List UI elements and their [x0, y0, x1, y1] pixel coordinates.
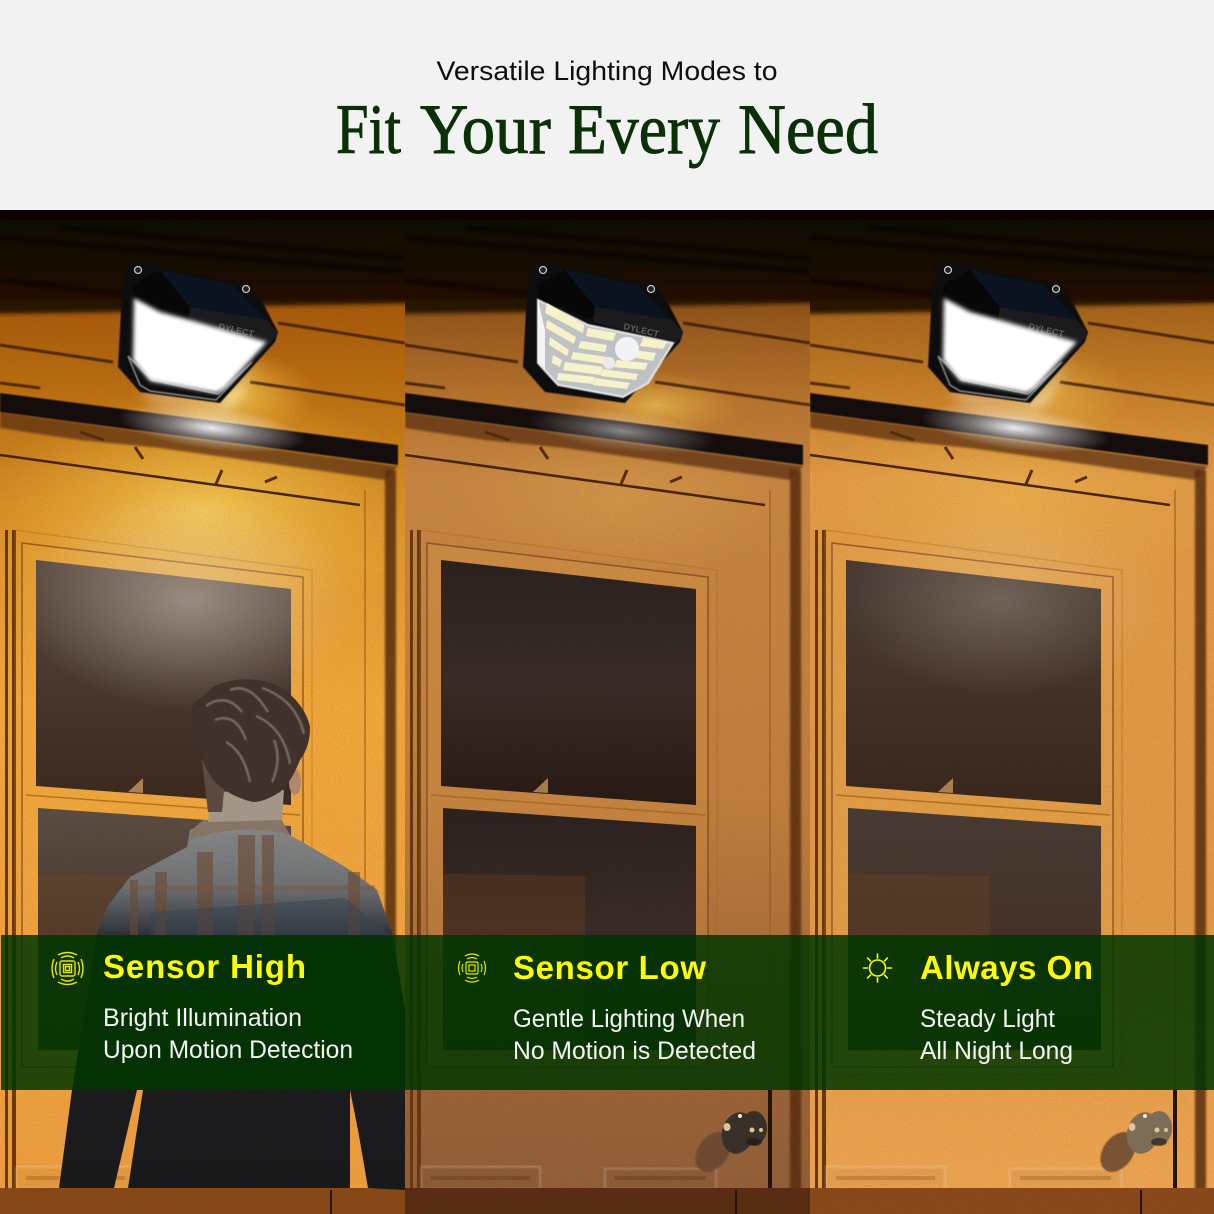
- lamp: sensor low, LEDs visible: [523, 262, 683, 403]
- icon: motion sensor small: [458, 954, 486, 982]
- lamp: always on, bright: [928, 262, 1088, 410]
- heading: sensor low: Sensor Low: [513, 949, 706, 986]
- door knob: [1093, 1090, 1177, 1188]
- icon: motion sensor: [52, 952, 83, 984]
- panel: sensor high photo: [0, 195, 430, 1214]
- title: Fit: [336, 91, 401, 169]
- heading: always on: Always On: [920, 949, 1093, 986]
- description: sensor low: [513, 1005, 756, 1065]
- subtitle: Versatile Lighting Modes to: [436, 56, 778, 86]
- person from behind: [59, 679, 405, 1190]
- title: Need: [738, 91, 878, 169]
- caption band: [1, 935, 1214, 1090]
- description: sensor high: Bright Illumination: [103, 1004, 302, 1032]
- panel: always on photo: [795, 195, 1214, 1214]
- lamp: sensor high, bright: [118, 262, 278, 410]
- title: [336, 91, 878, 169]
- description: always on: All Night Long: [920, 1037, 1073, 1065]
- caption: always on: [864, 949, 1093, 1065]
- description: sensor low: No Motion is Detected: [513, 1037, 756, 1065]
- title: Your: [420, 91, 551, 169]
- door knob: [688, 1090, 772, 1188]
- description: sensor high: Upon Motion Detection: [103, 1036, 353, 1064]
- description: sensor low: Gentle Lighting When: [513, 1005, 745, 1033]
- description: always on: [920, 1005, 1073, 1065]
- heading: sensor high: Sensor High: [103, 948, 306, 985]
- caption: sensor high: [52, 948, 353, 1064]
- caption: sensor low: [458, 949, 756, 1065]
- icon: sun: [864, 954, 892, 982]
- panel: sensor low photo: [390, 195, 825, 1214]
- description: always on: Steady Light: [920, 1005, 1055, 1033]
- title: Every: [568, 91, 720, 169]
- description: sensor high: [103, 1004, 353, 1064]
